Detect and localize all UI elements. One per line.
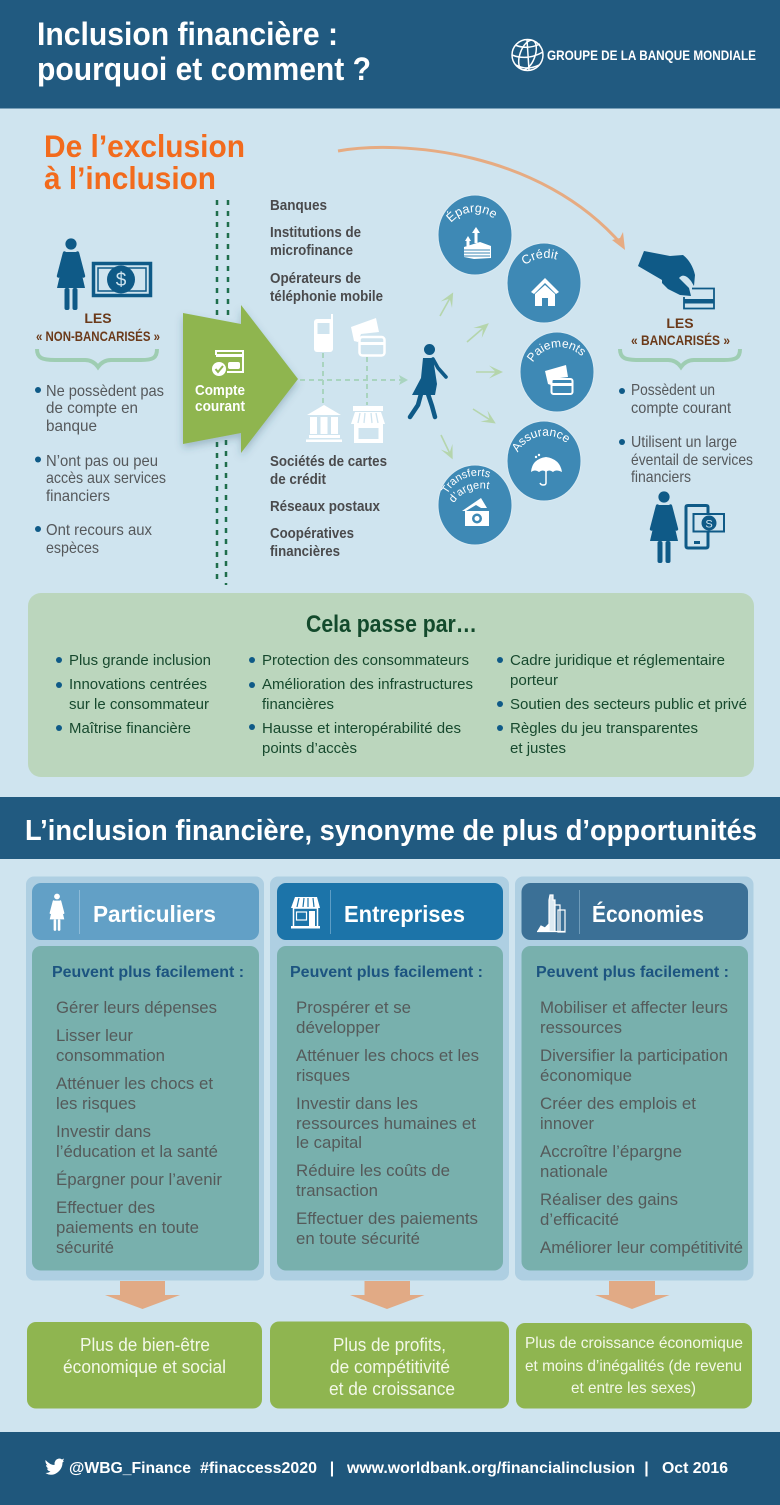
icon: city bbox=[537, 895, 565, 932]
list: column 3: Soutien des secteurs public et privé bbox=[510, 696, 747, 713]
list: N’ont pas ou peu bbox=[46, 453, 158, 470]
column body: l’éducation et la santé bbox=[56, 1142, 218, 1161]
dashed connectors bbox=[300, 353, 402, 405]
list bbox=[619, 382, 753, 486]
section band: opportunités bbox=[0, 797, 780, 859]
label: LES bbox=[84, 310, 112, 326]
circle: assurance: Assurance bbox=[512, 429, 569, 452]
list: Ont recours aux bbox=[46, 522, 152, 539]
list: providers top: Opérateurs de bbox=[270, 271, 361, 287]
icon: twitter bird bbox=[45, 1458, 64, 1475]
column body: d’efficacité bbox=[540, 1210, 619, 1229]
list: column 1 bbox=[69, 652, 211, 737]
heading: De l'exclusion à l'inclusion: De l’exclusion bbox=[44, 128, 245, 164]
list: providers bottom: Réseaux postaux bbox=[270, 499, 380, 515]
list: column 1: Maîtrise financière bbox=[69, 720, 191, 737]
icon: walking woman bbox=[410, 344, 446, 417]
column header: Particuliers bbox=[93, 901, 216, 927]
list bbox=[35, 383, 166, 557]
column header bbox=[277, 883, 503, 940]
heading: De l'exclusion à l'inclusion: à l’inclusion bbox=[44, 160, 216, 196]
label bbox=[631, 315, 730, 348]
circle: épargne: Épargne bbox=[446, 205, 496, 222]
header band bbox=[0, 0, 780, 108]
column body: Prospérer et se bbox=[296, 998, 411, 1017]
list: compte courant bbox=[631, 400, 732, 417]
list: Possèdent un bbox=[631, 382, 715, 399]
column body: Atténuer les chocs et bbox=[56, 1074, 213, 1093]
column: économies bbox=[515, 876, 754, 1280]
list: de compte en bbox=[46, 400, 138, 417]
icon: woman and banknote bbox=[57, 238, 150, 310]
list: providers bottom: de crédit bbox=[270, 472, 326, 488]
list: Ne possèdent pas bbox=[46, 383, 164, 400]
list: column 2: Hausse et interopérabilité des bbox=[262, 720, 461, 737]
label: « BANCARISÉS » bbox=[631, 332, 730, 348]
list: column 1: Plus grande inclusion bbox=[69, 652, 211, 669]
column body: Peuvent plus facilement : bbox=[52, 964, 244, 981]
brace bbox=[620, 349, 740, 367]
list: column 3: porteur bbox=[510, 672, 558, 689]
arrows: column to outcome bbox=[105, 1281, 670, 1309]
list: column 3: Règles du jeu transparentes bbox=[510, 720, 698, 737]
list: column 1: sur le consommateur bbox=[69, 696, 209, 713]
column body: le capital bbox=[296, 1133, 362, 1152]
outcome: profits: de compétitivité bbox=[330, 1357, 450, 1377]
outcome: bien-être: Plus de bien-être bbox=[80, 1335, 210, 1355]
column body: Effectuer des paiements bbox=[296, 1209, 478, 1228]
column body: les risques bbox=[56, 1094, 136, 1113]
column body: Améliorer leur compétitivité bbox=[540, 1238, 743, 1257]
panel: cela passe par bbox=[28, 593, 754, 777]
outcome: profits: et de croissance bbox=[329, 1379, 455, 1399]
list: providers top: Institutions de bbox=[270, 225, 361, 241]
column body: Accroître l’épargne bbox=[540, 1142, 682, 1161]
column body: risques bbox=[296, 1066, 350, 1085]
outcome: bien-être: économique et social bbox=[63, 1357, 226, 1377]
icon: woman and banknote: $ bbox=[116, 270, 127, 291]
circle: assurance bbox=[506, 420, 582, 502]
column body: en toute sécurité bbox=[296, 1229, 420, 1248]
brace bbox=[37, 349, 157, 367]
heading: De l'exclusion à l'inclusion bbox=[44, 128, 245, 196]
column body: Épargner pour l’avenir bbox=[56, 1170, 222, 1189]
list: column 2: points d’accès bbox=[262, 740, 357, 757]
arrow: compte courant bbox=[183, 305, 298, 453]
circle: transferts d'argent: d’argent bbox=[450, 482, 490, 502]
list: providers bottom: financières bbox=[270, 544, 340, 560]
footer text: @WBG_Finance bbox=[69, 1460, 191, 1477]
list: banque bbox=[46, 418, 97, 435]
list: financiers bbox=[631, 469, 691, 486]
icon: phone bbox=[314, 314, 333, 352]
dashed boundary line bbox=[217, 200, 228, 585]
icon: hand with card bbox=[638, 251, 714, 308]
column body: Atténuer les chocs et les bbox=[296, 1046, 479, 1065]
arrow: compte courant: Compte bbox=[195, 382, 245, 399]
icon: shop bbox=[291, 897, 320, 928]
outcome: bien-être bbox=[27, 1322, 262, 1408]
column body: innover bbox=[540, 1114, 594, 1133]
column header: Entreprises bbox=[344, 901, 465, 927]
icon: cards bbox=[545, 365, 572, 394]
list: providers top: Banques bbox=[270, 198, 327, 214]
icon: woman and mobile money bbox=[650, 491, 724, 563]
outcome: croissance: et moins d’inégalités (de revenu bbox=[525, 1358, 742, 1375]
circle: crédit bbox=[506, 242, 582, 324]
column body bbox=[522, 946, 748, 1270]
column header bbox=[522, 883, 748, 940]
label bbox=[36, 310, 160, 344]
list: providers bottom: Coopératives bbox=[270, 526, 354, 542]
icon: banknotes bbox=[462, 498, 489, 526]
title: Inclusion financière : bbox=[37, 16, 338, 52]
column body bbox=[277, 946, 503, 1270]
column: entreprises bbox=[270, 876, 509, 1280]
column body: paiements en toute bbox=[56, 1218, 199, 1237]
column body: Diversifier la participation bbox=[540, 1046, 728, 1065]
icon: bank bbox=[306, 405, 342, 442]
footer text: Oct 2016 bbox=[662, 1460, 728, 1477]
column body: ressources humaines et bbox=[296, 1114, 476, 1133]
column body: Réaliser des gains bbox=[540, 1190, 678, 1209]
footer bbox=[0, 1432, 780, 1505]
icon: cards bbox=[351, 318, 384, 356]
list: column 2: Protection des consommateurs bbox=[262, 652, 469, 669]
label: LES bbox=[666, 315, 694, 331]
icon: card with check bbox=[212, 351, 243, 376]
panel: bancarisés bbox=[619, 251, 753, 563]
column body: Peuvent plus facilement : bbox=[536, 964, 729, 981]
outcome: profits bbox=[270, 1322, 509, 1408]
footer text: | bbox=[644, 1460, 649, 1477]
footer text: #finaccess2020 bbox=[200, 1460, 317, 1477]
column header: Économies bbox=[592, 900, 704, 927]
title: pourquoi et comment ? bbox=[37, 51, 371, 87]
column body bbox=[32, 946, 259, 1270]
label: « NON-BANCARISÉS » bbox=[36, 328, 160, 344]
footer text: www.worldbank.org/financialinclusion bbox=[346, 1460, 635, 1477]
column body: Lisser leur bbox=[56, 1026, 133, 1045]
icon: shop bbox=[351, 406, 385, 443]
column body: ressources bbox=[540, 1018, 622, 1037]
outcome: croissance bbox=[516, 1323, 752, 1408]
column body: transaction bbox=[296, 1181, 378, 1200]
column body: développer bbox=[296, 1018, 380, 1037]
icon: umbrella bbox=[531, 454, 562, 485]
outcome: profits: Plus de profits, bbox=[333, 1335, 446, 1355]
circle: paiements bbox=[520, 332, 594, 412]
circle: transferts d'argent bbox=[438, 464, 512, 546]
list: providers top: microfinance bbox=[270, 243, 353, 259]
list: providers top bbox=[270, 198, 383, 305]
footer text bbox=[69, 1460, 728, 1477]
list: column 1: Innovations centrées bbox=[69, 676, 207, 693]
column body: Créer des emplois et bbox=[540, 1094, 696, 1113]
list: column 2 bbox=[262, 652, 473, 757]
bullets bbox=[56, 657, 503, 731]
icon: woman and mobile money: S bbox=[705, 518, 713, 530]
list: espèces bbox=[46, 540, 99, 557]
column body: Effectuer des bbox=[56, 1198, 155, 1217]
footer text: | bbox=[330, 1460, 334, 1477]
heading: Cela passe par… bbox=[306, 611, 477, 638]
column body: Investir dans bbox=[56, 1122, 151, 1141]
column body: Gérer leurs dépenses bbox=[56, 998, 217, 1017]
circle: transferts d'argent: Transferts bbox=[441, 468, 490, 492]
column body: sécurité bbox=[56, 1238, 114, 1257]
list: column 3: et justes bbox=[510, 740, 566, 757]
column body: économique bbox=[540, 1066, 632, 1085]
column body: consommation bbox=[56, 1046, 165, 1065]
list: providers bottom: Sociétés de cartes bbox=[270, 454, 387, 470]
list: financiers bbox=[46, 488, 110, 505]
list: providers top: téléphonie mobile bbox=[270, 289, 383, 305]
outcome: croissance: et entre les sexes) bbox=[571, 1380, 696, 1397]
title bbox=[37, 16, 371, 87]
column body: Investir dans les bbox=[296, 1094, 418, 1113]
icon: money stack with arrows bbox=[464, 227, 491, 259]
circle: crédit: Crédit bbox=[522, 248, 558, 264]
column: particuliers bbox=[26, 876, 264, 1280]
arrows: to services bbox=[434, 289, 503, 462]
column body: nationale bbox=[540, 1162, 608, 1181]
list: column 2: financières bbox=[262, 696, 334, 713]
column body: Mobiliser et affecter leurs bbox=[540, 998, 728, 1017]
curved arrow: exclusion to inclusion bbox=[338, 147, 625, 250]
column header bbox=[32, 883, 259, 940]
panel: non-bancarisés bbox=[35, 238, 166, 557]
circle: paiements: Paiements bbox=[526, 340, 585, 362]
list: accès aux services bbox=[46, 470, 166, 487]
list: providers bottom bbox=[270, 454, 387, 560]
list: Utilisent un large bbox=[631, 434, 737, 451]
list: column 3 bbox=[510, 652, 747, 757]
arrow: compte courant: courant bbox=[195, 398, 245, 415]
logo: World Bank Group bbox=[512, 38, 756, 72]
column body: Peuvent plus facilement : bbox=[290, 964, 483, 981]
arrowhead: dashed connector bbox=[399, 375, 408, 385]
icon: woman bbox=[50, 894, 64, 931]
list: éventail de services bbox=[631, 452, 753, 469]
list: column 3: Cadre juridique et réglementaire bbox=[510, 652, 725, 669]
icon: house bbox=[531, 278, 559, 306]
circle: épargne bbox=[438, 194, 512, 276]
list: column 2: Amélioration des infrastructures bbox=[262, 676, 473, 693]
column body: Réduire les coûts de bbox=[296, 1161, 450, 1180]
outcome: croissance: Plus de croissance économique bbox=[525, 1335, 743, 1352]
section band: opportunités: L’inclusion financière, synonyme de plus d’opportunités bbox=[25, 815, 757, 847]
